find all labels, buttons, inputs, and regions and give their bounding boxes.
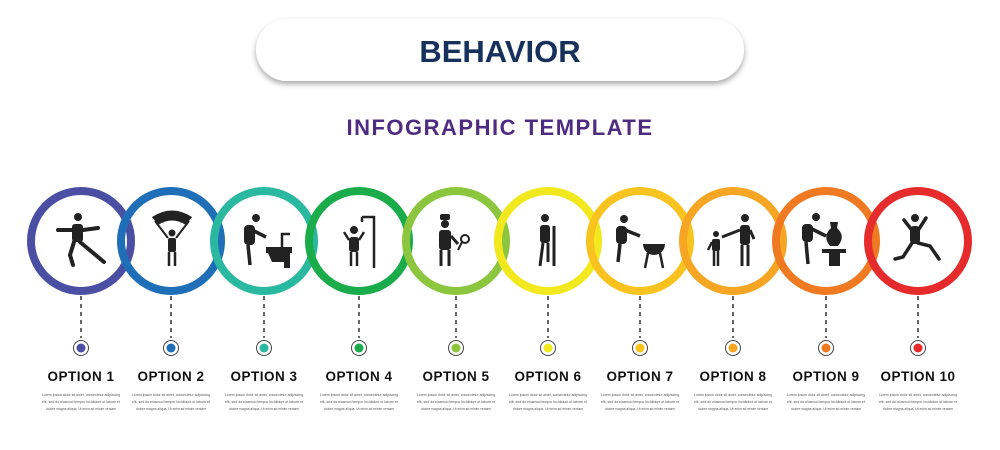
title pill: BEHAVIOR: [419, 34, 581, 69]
option 10: Lorem ipsum dolor sit amet, consectetur adipiscing: [879, 392, 957, 397]
option 2: dolore magna aliqua. Ut enim ad minim veniam: [136, 406, 207, 411]
option 4: OPTION 4: [325, 369, 393, 384]
option 10: elit, sed do eiusmod tempor incididunt ut labore et: [879, 399, 958, 404]
icon: parent and child: [708, 214, 754, 266]
option 7: elit, sed do eiusmod tempor incididunt ut labore et: [601, 399, 680, 404]
option 1: dolore magna aliqua. Ut enim ad minim veniam: [46, 406, 117, 411]
option 1: OPTION 1: [47, 369, 115, 384]
option 8: [683, 191, 783, 411]
option 2: elit, sed do eiusmod tempor incididunt ut labore et: [132, 399, 211, 404]
icon: paraglider: [152, 210, 192, 266]
option 10: OPTION 10: [880, 369, 956, 384]
option 1: [31, 191, 131, 411]
subtitle: INFOGRAPHIC TEMPLATE: [346, 115, 654, 140]
option 5: [406, 191, 506, 411]
option 8: OPTION 8: [699, 369, 767, 384]
option 5: elit, sed do eiusmod tempor incididunt ut labore et: [417, 399, 496, 404]
option 8: Lorem ipsum dolor sit amet, consectetur adipiscing: [694, 392, 772, 397]
option 6: [498, 191, 598, 411]
option 6: Lorem ipsum dolor sit amet, consectetur adipiscing: [509, 392, 587, 397]
option 4: elit, sed do eiusmod tempor incididunt ut labore et: [320, 399, 399, 404]
option 6: dolore magna aliqua. Ut enim ad minim veniam: [513, 406, 584, 411]
option 2: [121, 191, 221, 411]
option 7: OPTION 7: [606, 369, 674, 384]
option 3: OPTION 3: [230, 369, 298, 384]
option 3: [214, 191, 314, 411]
icon: washing hands: [244, 214, 292, 268]
option 4: dolore magna aliqua. Ut enim ad minim veniam: [324, 406, 395, 411]
option 6: elit, sed do eiusmod tempor incididunt ut labore et: [509, 399, 588, 404]
option 5: OPTION 5: [422, 369, 490, 384]
icon: injured with crutch: [540, 214, 554, 266]
option 1: elit, sed do eiusmod tempor incididunt ut labore et: [42, 399, 121, 404]
option 9: OPTION 9: [792, 369, 860, 384]
option 3: dolore magna aliqua. Ut enim ad minim veniam: [229, 406, 300, 411]
option 7: Lorem ipsum dolor sit amet, consectetur adipiscing: [601, 392, 679, 397]
icon: pottery: [802, 213, 846, 266]
option 10: [868, 191, 968, 411]
option 2: OPTION 2: [137, 369, 205, 384]
option 9: [776, 191, 876, 411]
title pill: [256, 19, 744, 81]
option 3: elit, sed do eiusmod tempor incididunt ut labore et: [225, 399, 304, 404]
option 8: elit, sed do eiusmod tempor incididunt ut labore et: [694, 399, 773, 404]
option 10: dolore magna aliqua. Ut enim ad minim veniam: [883, 406, 954, 411]
icon: shower: [344, 217, 374, 268]
option 8: dolore magna aliqua. Ut enim ad minim veniam: [698, 406, 769, 411]
icon: barbecue: [616, 215, 665, 268]
option 5: Lorem ipsum dolor sit amet, consectetur adipiscing: [417, 392, 495, 397]
option 7: dolore magna aliqua. Ut enim ad minim veniam: [605, 406, 676, 411]
option 2: Lorem ipsum dolor sit amet, consectetur adipiscing: [132, 392, 210, 397]
option 7: [590, 191, 690, 411]
option 5: dolore magna aliqua. Ut enim ad minim veniam: [421, 406, 492, 411]
option 9: elit, sed do eiusmod tempor incididunt ut labore et: [787, 399, 866, 404]
option 1: Lorem ipsum dolor sit amet, consectetur adipiscing: [42, 392, 120, 397]
option 4: Lorem ipsum dolor sit amet, consectetur adipiscing: [320, 392, 398, 397]
option 9: Lorem ipsum dolor sit amet, consectetur adipiscing: [787, 392, 865, 397]
option 3: Lorem ipsum dolor sit amet, consectetur adipiscing: [225, 392, 303, 397]
option 9: dolore magna aliqua. Ut enim ad minim veniam: [791, 406, 862, 411]
option 6: OPTION 6: [514, 369, 582, 384]
icon: jumping figure: [895, 214, 939, 259]
icon: chef: [439, 214, 469, 266]
icon: stretching figure: [58, 213, 104, 265]
option 4: [309, 191, 409, 411]
